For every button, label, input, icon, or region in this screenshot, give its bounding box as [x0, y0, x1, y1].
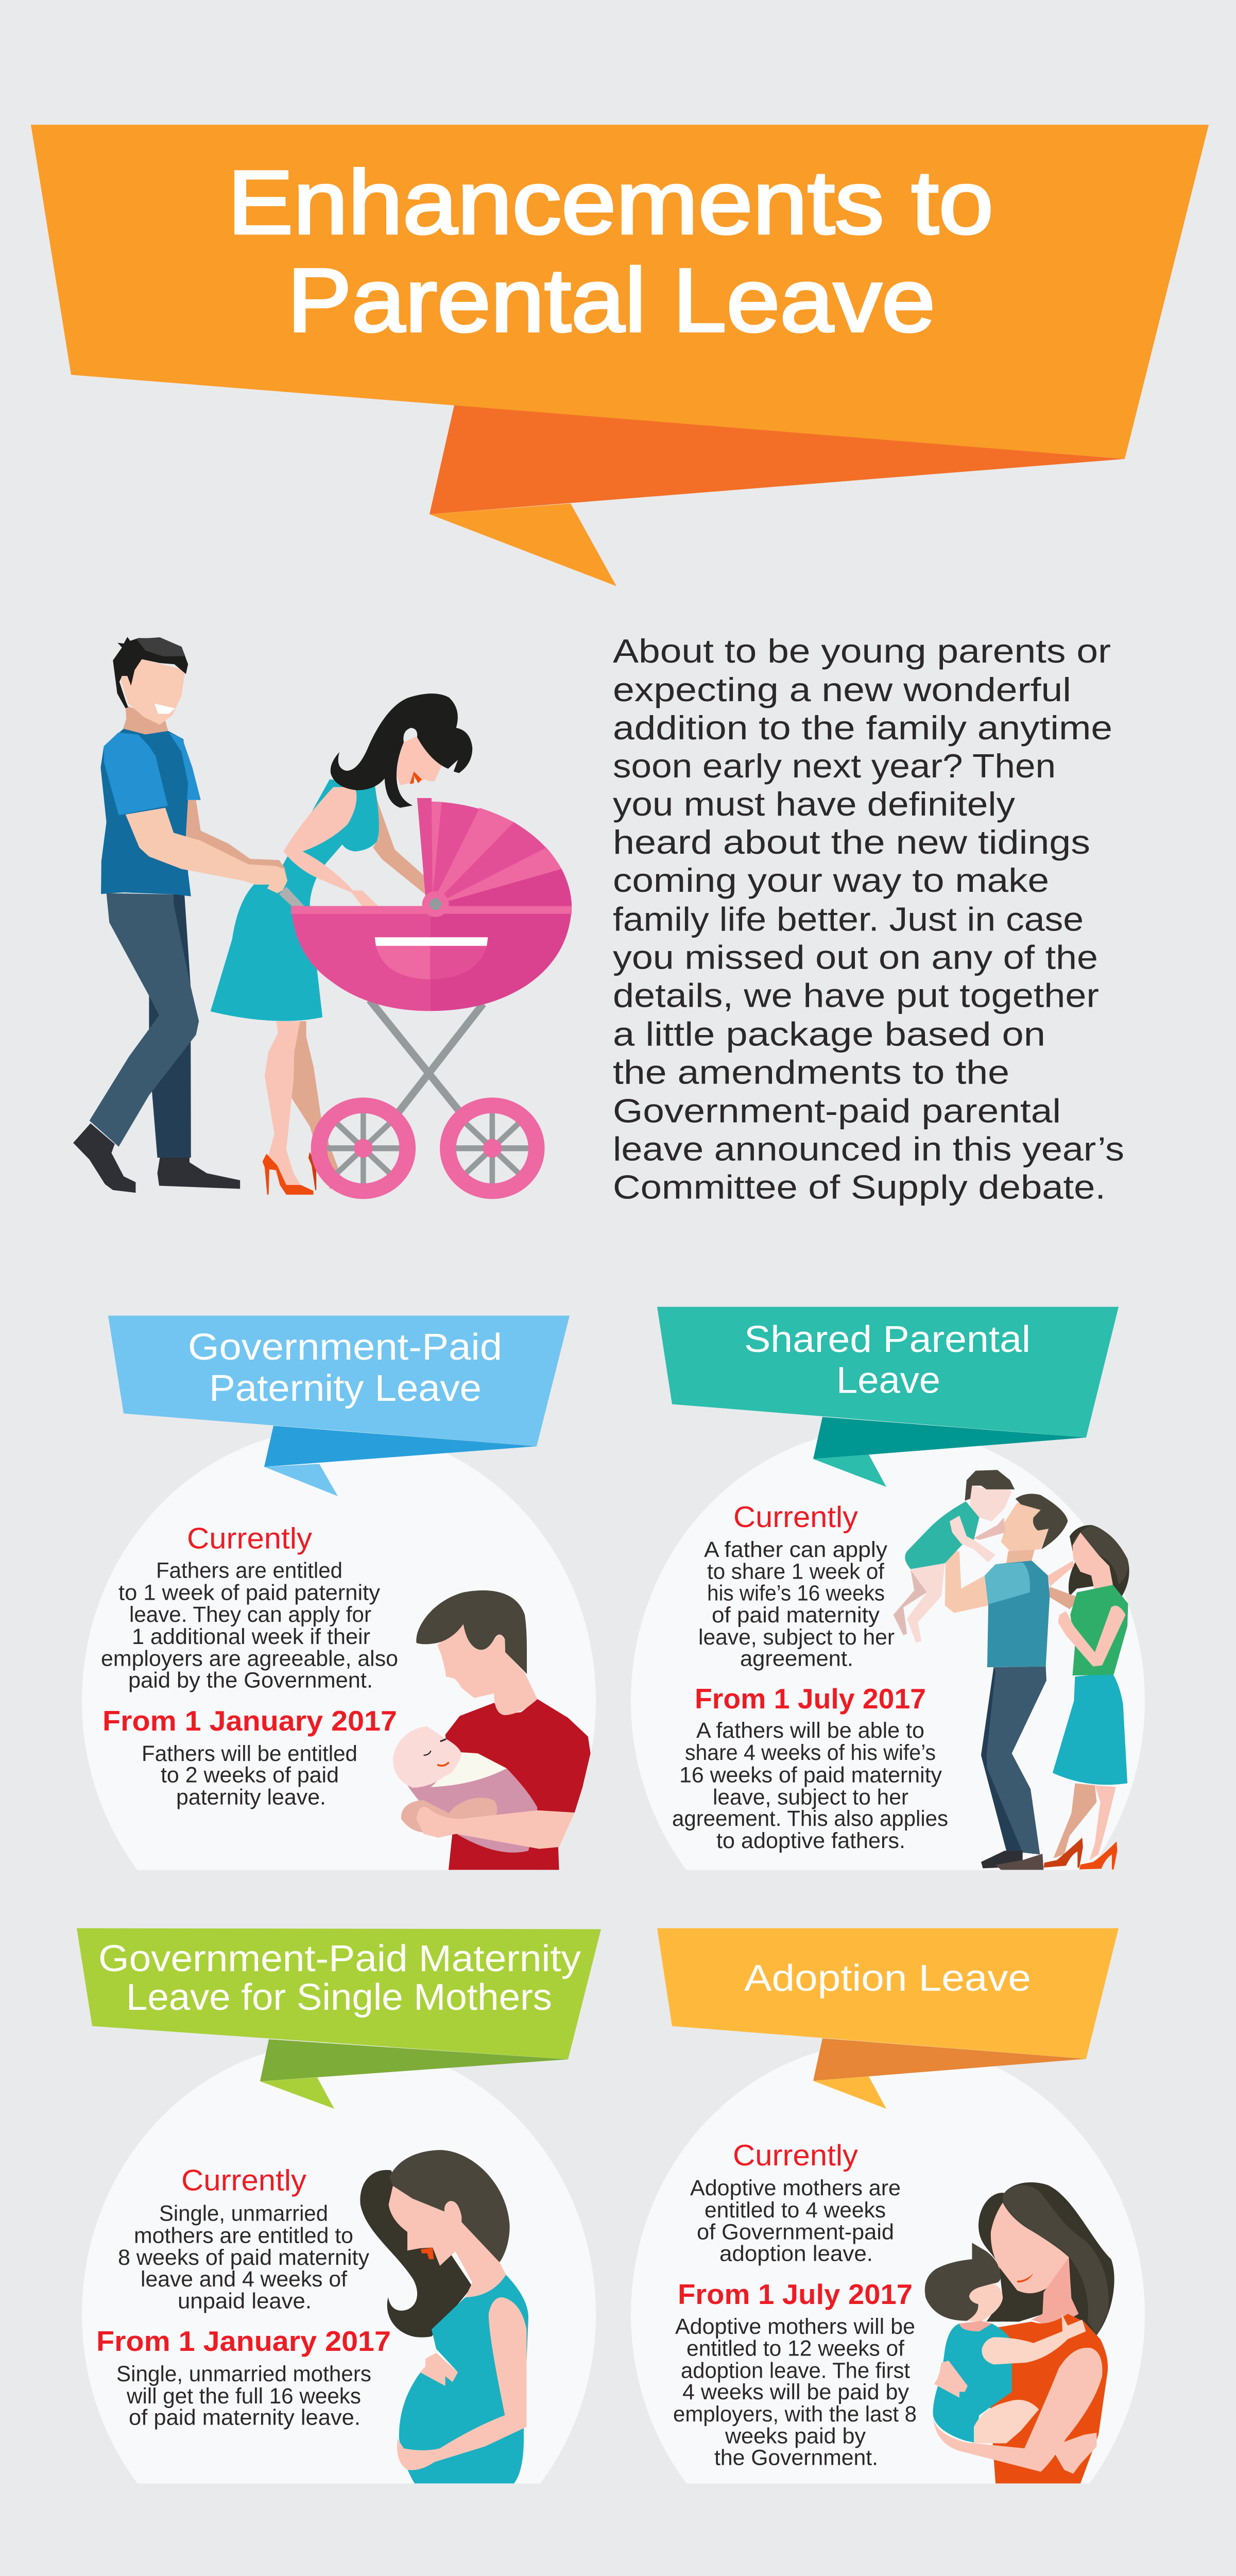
intro paragraph: About to be young parents or [613, 633, 1111, 670]
right wheel [440, 1097, 545, 1199]
left wheel [311, 1097, 416, 1199]
illustration: parents with pram [73, 637, 572, 1199]
intro paragraph [613, 633, 1124, 1206]
heading: Leave [836, 1359, 940, 1401]
intro paragraph: leave announced in this year’s [613, 1131, 1124, 1168]
from date text: From 1 January 2017 [102, 1705, 397, 1737]
from date text: From 1 July 2017 [678, 2278, 913, 2310]
from date text: share 4 weeks of his wife’s [685, 1740, 936, 1765]
intro paragraph: addition to the family anytime [613, 709, 1112, 747]
from date text: agreement. This also applies [672, 1806, 948, 1831]
man figure [73, 637, 287, 1193]
currently text: of paid maternity [712, 1603, 880, 1628]
currently text: entitled to 4 weeks [705, 2198, 886, 2223]
intro paragraph: you must have definitely [613, 786, 1016, 823]
currently text: of Government-paid [697, 2220, 894, 2244]
title banner [31, 125, 1209, 586]
intro paragraph: heard about the new tidings [613, 824, 1090, 861]
from date text [673, 2278, 917, 2470]
panel: shared parental leave [631, 1307, 1145, 1870]
from date text: the Government. [714, 2445, 878, 2470]
currently text: unpaid leave. [178, 2289, 312, 2313]
pram [291, 798, 572, 1199]
intro paragraph: family life better. Just in case [613, 901, 1084, 938]
currently text: Adoptive mothers are [690, 2176, 901, 2200]
from date text: will get the full 16 weeks [126, 2384, 361, 2409]
currently text: Currently [733, 2139, 858, 2172]
heading [744, 1318, 1031, 1401]
from date text: A fathers will be able to [696, 1718, 924, 1743]
illustration: mother hugging child [925, 2182, 1114, 2483]
currently text: A father can apply [704, 1537, 887, 1562]
from date text: weeks paid by [725, 2424, 866, 2448]
from date text: to 2 weeks of paid [161, 1763, 339, 1787]
currently text: leave and 4 weeks of [141, 2267, 348, 2292]
from date text: paternity leave. [176, 1785, 326, 1809]
from date text: 4 weeks will be paid by [682, 2380, 909, 2404]
intro paragraph: you missed out on any of the [613, 939, 1098, 976]
currently text: Single, unmarried [159, 2201, 328, 2226]
heading: Government-Paid [188, 1326, 502, 1368]
intro paragraph: the amendments to the [613, 1054, 1009, 1091]
from date text: entitled to 12 weeks of [686, 2336, 905, 2361]
currently text [698, 1500, 895, 1671]
from date text: to adoptive fathers. [716, 1828, 905, 1853]
from date text: leave, subject to her [713, 1785, 908, 1809]
heading: Shared Parental [744, 1318, 1031, 1360]
heading: Paternity Leave [209, 1367, 482, 1409]
currently text [101, 1521, 398, 1692]
from date text: From 1 July 2017 [695, 1683, 926, 1715]
currently text: to share 1 week of [707, 1560, 885, 1584]
from date text: adoption leave. The first [681, 2358, 910, 2383]
from date text: Adoptive mothers will be [675, 2314, 915, 2339]
currently text: Currently [733, 1500, 858, 1534]
currently text [118, 2163, 369, 2313]
from date text [672, 1683, 948, 1853]
panel: paternity leave [82, 1316, 596, 1870]
currently text: paid by the Government. [128, 1668, 373, 1692]
currently text: Currently [181, 2163, 306, 2197]
currently text: adoption leave. [719, 2241, 873, 2266]
from date text: 16 weeks of paid maternity [679, 1763, 942, 1787]
currently text: mothers are entitled to [134, 2223, 353, 2248]
intro paragraph: Committee of Supply debate. [613, 1169, 1106, 1206]
intro paragraph: soon early next year? Then [613, 748, 1056, 785]
currently text: his wife’s 16 weeks [707, 1581, 885, 1605]
banner: shared [657, 1307, 1119, 1487]
heading: Adoption Leave [744, 1957, 1031, 1999]
banner: paternity [108, 1316, 570, 1496]
currently text: 1 additional week if their [132, 1624, 370, 1649]
panel: adoption leave [631, 1928, 1145, 2484]
from date text: Single, unmarried mothers [116, 2362, 371, 2386]
heading: Leave for Single Mothers [126, 1976, 552, 2018]
from date text [102, 1705, 397, 1809]
from date text: From 1 January 2017 [96, 2325, 391, 2357]
currently text: 8 weeks of paid maternity [118, 2245, 369, 2270]
heading [98, 1938, 581, 2018]
intro paragraph: a little package based on [613, 1016, 1045, 1053]
from date text: employers, with the last 8 [673, 2402, 917, 2427]
currently text: leave. They can apply for [129, 1602, 371, 1627]
currently text: Currently [187, 1521, 312, 1555]
illustration: family lifting child [894, 1470, 1129, 1870]
heading [188, 1326, 502, 1409]
heading: Government-Paid Maternity [98, 1938, 581, 1979]
panel: maternity leave for single mothers [77, 1928, 601, 2484]
title [228, 152, 993, 351]
title: Parental Leave [287, 250, 935, 351]
woman figure [211, 693, 472, 1195]
banner: maternity [77, 1928, 601, 2109]
illustration: father holding baby [393, 1590, 591, 1870]
from date text: Fathers will be entitled [142, 1741, 357, 1766]
title: Enhancements to [228, 152, 993, 253]
currently text: to 1 week of paid paternity [118, 1580, 380, 1605]
currently text: leave, subject to her [698, 1625, 895, 1650]
currently text: agreement. [740, 1647, 853, 1671]
intro paragraph: Government-paid parental [613, 1093, 1061, 1130]
intro paragraph: coming your way to make [613, 862, 1049, 900]
illustration: pregnant woman [360, 2150, 528, 2483]
intro paragraph: details, we have put together [613, 977, 1099, 1014]
currently text: Fathers are entitled [156, 1558, 342, 1583]
intro paragraph: expecting a new wonderful [613, 671, 1071, 708]
from date text [96, 2325, 391, 2430]
currently text [690, 2139, 901, 2266]
currently text: employers are agreeable, also [101, 1647, 398, 1671]
from date text: of paid maternity leave. [129, 2405, 360, 2430]
banner: adoption [657, 1928, 1119, 2109]
